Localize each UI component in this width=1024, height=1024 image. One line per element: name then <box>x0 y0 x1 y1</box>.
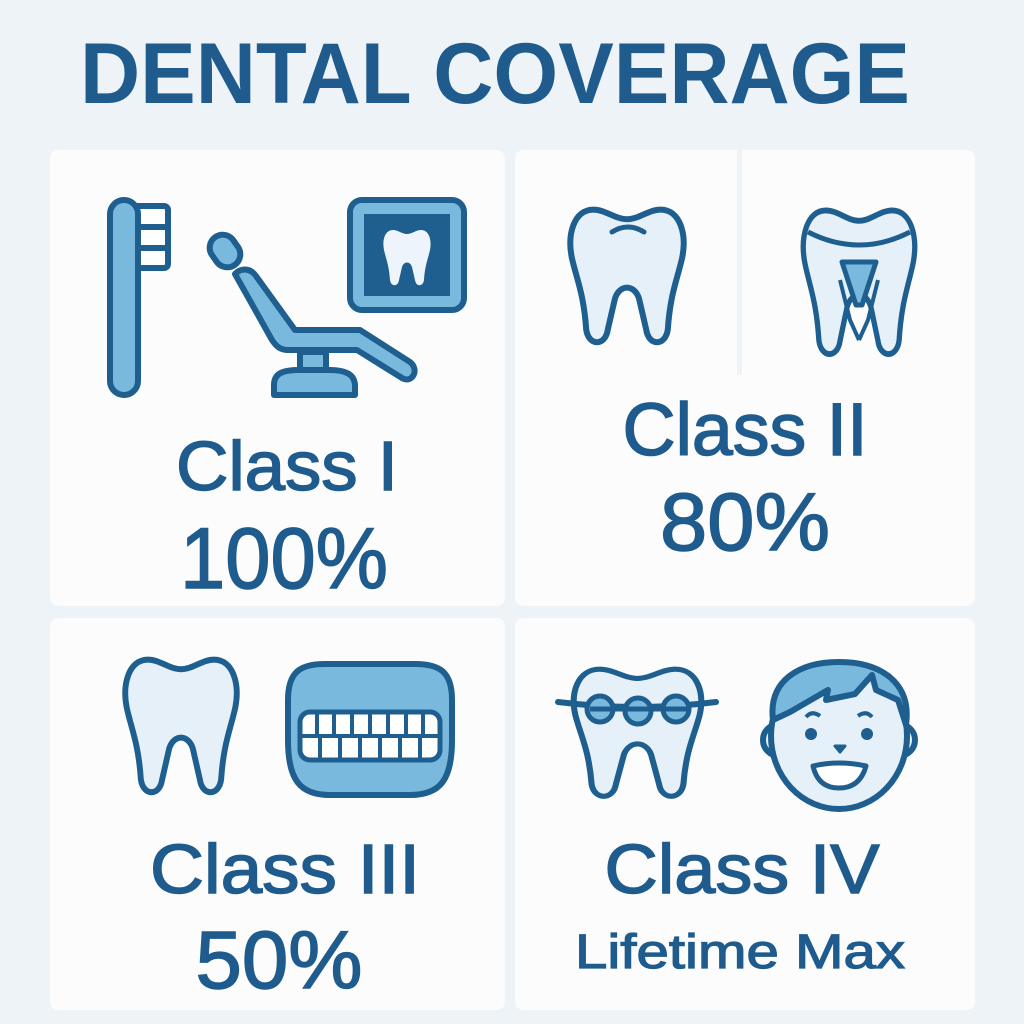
panel: Class IV <box>515 618 975 1010</box>
label: 50%: 50% <box>196 915 362 1006</box>
label: Lifetime Max: Lifetime Max <box>575 926 905 979</box>
title: DENTAL COVERAGE <box>80 26 910 122</box>
icon: toothbrush <box>110 200 168 395</box>
panel: Class III <box>50 618 505 1010</box>
label: Class II: Class II <box>622 388 868 471</box>
label: Class IV: Class IV <box>604 830 880 908</box>
icon: tooth with braces <box>558 669 716 796</box>
panel: Class II <box>515 150 975 606</box>
label: 100%: 100% <box>180 511 388 607</box>
icon: tooth <box>570 210 684 342</box>
label: Class III: Class III <box>150 830 420 908</box>
icon: tooth <box>125 660 237 792</box>
icon: boy face <box>763 662 915 809</box>
label: Class I: Class I <box>176 427 398 505</box>
icon: dentures <box>288 664 452 795</box>
icon: dental chair <box>205 230 415 395</box>
label: 80%: 80% <box>660 477 830 568</box>
icon: x-ray <box>350 200 464 310</box>
icon: crown tooth <box>803 210 915 354</box>
panel: Class I <box>50 150 505 607</box>
